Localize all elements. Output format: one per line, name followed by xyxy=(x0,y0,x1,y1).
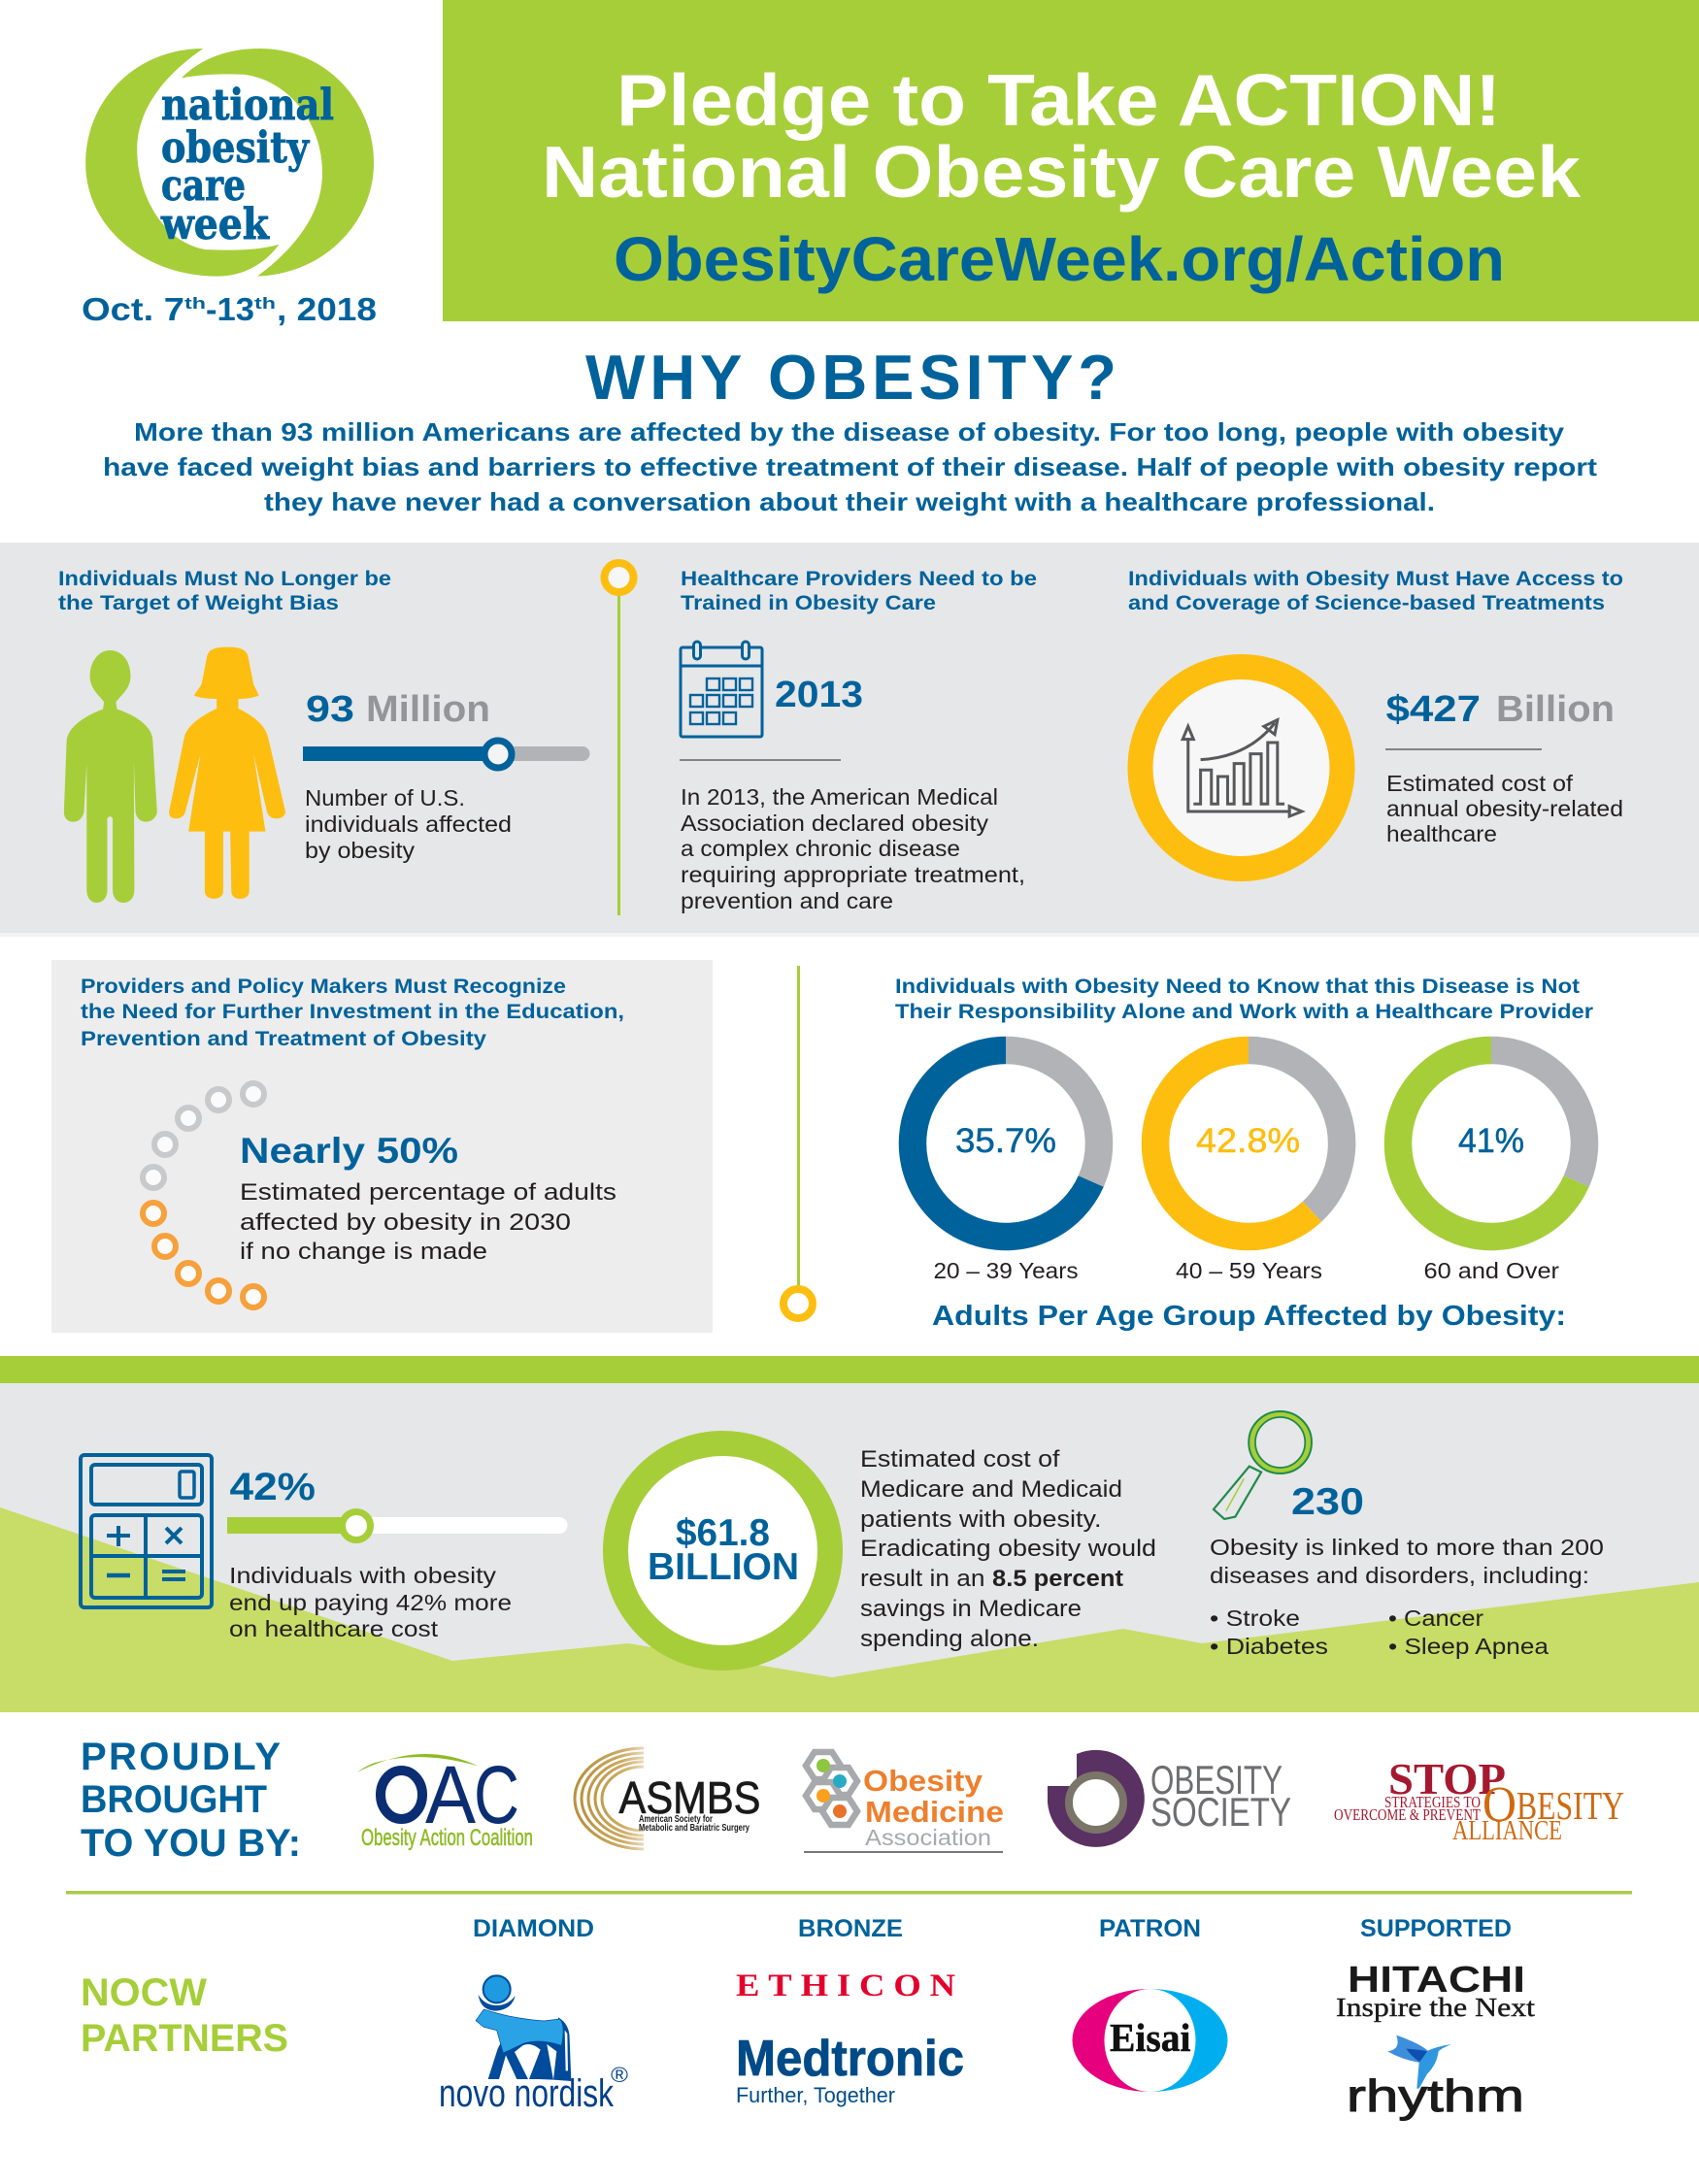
icon: calculator xyxy=(81,1455,212,1607)
description: linked diseases xyxy=(1210,1535,1604,1659)
heading: investment: Prevention and Treatment of Obesity xyxy=(81,1028,486,1050)
heading: weight bias xyxy=(58,568,391,614)
stat: 93 million: Million xyxy=(366,689,490,730)
logo: the obesity society xyxy=(1048,1750,1291,1847)
logo: ASMBS xyxy=(575,1748,761,1849)
chart caption: Adults Per Age Group Affected by Obesity: xyxy=(932,1301,1566,1332)
heading: nocw partners: PARTNERS xyxy=(81,2017,288,2060)
intro text block: have faced weight bias and barriers to effective treatment of their disease. Half of people with obesity report xyxy=(103,452,1597,481)
stat: 42 percent: 42% xyxy=(229,1466,316,1508)
partner tier: supported xyxy=(1336,1915,1536,2121)
logo: obesity medicine association: Obesity xyxy=(863,1764,983,1798)
logo: ASMBS: Metabolic and Bariatric Surgery xyxy=(639,1823,750,1834)
stat: 427 billion xyxy=(1386,689,1615,730)
logo: obesity action coalition: Obesity Action Coalition xyxy=(361,1825,533,1851)
donut chart: 40-59 years xyxy=(1155,1050,1342,1283)
panel: nearly 50 percent xyxy=(51,960,713,1333)
description: annual cost: healthcare xyxy=(1386,821,1497,846)
description: annual cost xyxy=(1386,771,1623,846)
logo: eisai: Eisai xyxy=(1110,2015,1190,2060)
heading: healthcare providers: Trained in Obesity Care xyxy=(681,592,936,614)
heading: responsibility: Their Responsibility Alone and Work with a Healthcare Provider xyxy=(895,1001,1593,1023)
description: 2013 declaration: In 2013, the American Medical xyxy=(681,784,998,810)
description: 2030 estimate: affected by obesity in 2030 xyxy=(240,1209,571,1236)
stat: 427 billion: Billion xyxy=(1496,689,1615,730)
description: linked diseases: Obesity is linked to more than 200 xyxy=(1210,1535,1604,1560)
heading: healthcare providers: Healthcare Providers Need to be xyxy=(681,568,1037,590)
logo: the obesity society: OBESITY xyxy=(1150,1757,1283,1803)
partner tier: patron xyxy=(1072,1915,1227,2092)
description: medicare savings: Estimated cost of xyxy=(860,1446,1060,1473)
icon: rising chart in yellow ring xyxy=(1140,667,1342,869)
logo date: , 2018 xyxy=(277,291,377,327)
description: number of individuals: Number of U.S. xyxy=(305,785,465,811)
slider: 42 percent xyxy=(227,1512,567,1539)
logo: obesity medicine association: Association xyxy=(865,1825,991,1850)
heading: nocw partners: NOCW xyxy=(81,1971,207,2014)
logo: hitachi: Inspire the Next xyxy=(1336,1993,1536,2022)
section: access and coverage xyxy=(1128,568,1623,869)
logo: stop obesity alliance: STOP xyxy=(1388,1754,1506,1803)
section: age group donuts xyxy=(895,976,1593,1332)
description: 2030 estimate: Estimated percentage of adults xyxy=(240,1179,616,1206)
description: number of individuals xyxy=(305,785,512,863)
tier label: bronze: BRONZE xyxy=(798,1915,903,1942)
heading: proudly brought to you by: TO YOU BY: xyxy=(81,1822,301,1865)
logo: national obesity care week xyxy=(82,49,377,327)
logo date: Oct. 7 xyxy=(82,291,184,327)
description: number of individuals: by obesity xyxy=(305,838,416,863)
logo: stop obesity alliance: ALLIANCE xyxy=(1452,1816,1562,1846)
description: 2013 declaration: a complex chronic disease xyxy=(681,836,960,861)
tier label: supported: SUPPORTED xyxy=(1360,1915,1512,1942)
stat: 427 billion: $427 xyxy=(1386,689,1481,730)
logo: stop obesity alliance: OVERCOME & PREVENT xyxy=(1334,1805,1481,1824)
heading: nocw partners xyxy=(81,1971,288,2060)
description: 2013 declaration: requiring appropriate treatment, xyxy=(681,862,1025,887)
donut chart: 60 and over xyxy=(1398,1050,1584,1283)
stat: 2013: 2013 xyxy=(775,675,863,715)
stat: nearly 50 percent: Nearly 50% xyxy=(240,1131,458,1171)
description: medicare savings: Eradicating obesity would xyxy=(860,1536,1156,1562)
banner: pledge to take action: ObesityCareWeek.org/Action xyxy=(614,224,1505,294)
description: linked diseases: • Stroke xyxy=(1210,1605,1300,1631)
heading: responsibility xyxy=(895,976,1593,1023)
partner tier: bronze xyxy=(736,1915,964,2107)
divider with yellow ring xyxy=(783,966,813,1318)
intro text block xyxy=(103,417,1597,516)
banner: pledge to take action: National Obesity Care Week xyxy=(542,131,1581,213)
donut chart: 40-59 years: 40 – 59 Years xyxy=(1176,1258,1322,1283)
description: 42 percent: on healthcare cost xyxy=(229,1616,439,1641)
intro text block: they have never had a conversation about their weight with a healthcare professional. xyxy=(264,487,1435,516)
logo: eisai xyxy=(1072,1989,1227,2092)
stat: 230: 230 xyxy=(1291,1481,1364,1523)
description: medicare savings: Medicare and Medicaid xyxy=(860,1476,1122,1503)
heading: access and coverage xyxy=(1128,568,1623,614)
heading: investment: Providers and Policy Makers Must Recognize xyxy=(81,976,566,998)
logo swirl xyxy=(85,49,374,277)
logo: obesity medicine association: Medicine xyxy=(865,1795,1004,1829)
heading: investment xyxy=(81,976,624,1050)
logo wordmark: obesity xyxy=(161,123,310,173)
heading: proudly brought to you by: BROUGHT xyxy=(81,1778,267,1821)
description: annual cost: annual obesity-related xyxy=(1386,796,1623,821)
description: 2030 estimate xyxy=(240,1179,616,1265)
heading: why obesity: WHY OBESITY? xyxy=(585,342,1116,413)
description: number of individuals: individuals affected xyxy=(305,811,512,837)
logo: ethicon: ETHICON xyxy=(736,1969,964,2003)
logo wordmark: week xyxy=(160,200,270,249)
description: 42 percent xyxy=(229,1563,512,1641)
logo: obesity action coalition xyxy=(357,1749,533,1851)
donut chart: 20-39 years: 35.7% xyxy=(955,1122,1056,1160)
description: 2013 declaration: Association declared obesity xyxy=(681,811,989,836)
logo: hitachi xyxy=(1336,1960,1536,2022)
heading: healthcare providers xyxy=(681,568,1037,614)
icon: calendar xyxy=(681,642,762,737)
logo: novo nordisk: novo nordisk xyxy=(439,2072,615,2115)
heading: investment: the Need for Further Investment in the Education, xyxy=(81,1001,624,1023)
banner: pledge to take action: Pledge to Take ACTION! xyxy=(616,59,1501,141)
tier label: diamond: DIAMOND xyxy=(473,1915,594,1942)
description: 2013 declaration xyxy=(681,784,1025,913)
heading: proudly brought to you by: PROUDLY xyxy=(81,1736,281,1778)
logo: medtronic: Medtronic xyxy=(736,2031,964,2087)
icon: magnifying glass xyxy=(1214,1411,1312,1519)
logo: novo nordisk: ® xyxy=(611,2063,628,2087)
section: weight bias xyxy=(58,568,590,903)
logo: rhythm xyxy=(1347,2035,1524,2121)
description: linked diseases: • Sleep Apnea xyxy=(1388,1634,1549,1659)
logo wordmark: care xyxy=(161,161,246,211)
logo: ASMBS: American Society for xyxy=(639,1814,713,1825)
description: linked diseases: diseases and disorders, including: xyxy=(1210,1563,1589,1588)
panel: top gray band xyxy=(0,543,1699,937)
logo date: th xyxy=(254,294,276,313)
heading: weight bias: Individuals Must No Longer be xyxy=(58,568,391,590)
logo: obesity action coalition: A xyxy=(425,1749,476,1840)
tier label: patron: PATRON xyxy=(1099,1915,1201,1942)
logo wordmark xyxy=(160,81,334,249)
logo: stop obesity alliance: BESITY xyxy=(1516,1783,1624,1828)
logo: stop obesity alliance xyxy=(1334,1754,1624,1846)
description: annual cost: Estimated cost of xyxy=(1386,771,1574,796)
description: 2013 declaration: prevention and care xyxy=(681,888,893,913)
stat: 93 million: 93 xyxy=(306,689,354,730)
logo date: th xyxy=(184,294,206,313)
description: 42 percent: end up paying 42% more xyxy=(229,1590,512,1615)
panel: cost band xyxy=(0,1356,1699,1712)
description: linked diseases: • Diabetes xyxy=(1210,1634,1328,1659)
slider: 93 million xyxy=(303,741,590,768)
logo: hitachi: HITACHI xyxy=(1348,1960,1525,2001)
logo: stop obesity alliance: STRATEGIES TO xyxy=(1384,1793,1481,1811)
logo: medtronic: Further, Together xyxy=(736,2083,895,2107)
icon: dot arc xyxy=(143,1083,264,1307)
intro text block: More than 93 million Americans are affected by the disease of obesity. For too long, people with obesity xyxy=(134,417,1565,447)
description: medicare savings xyxy=(860,1446,1156,1652)
logo: the obesity society: SOCIETY xyxy=(1150,1789,1291,1835)
logo wordmark: national xyxy=(161,81,334,130)
donut chart: 60 and over: 60 and Over xyxy=(1423,1258,1559,1283)
logo date xyxy=(82,291,377,327)
description: medicare savings: savings in Medicare xyxy=(860,1596,1082,1622)
description: linked diseases: • Cancer xyxy=(1388,1605,1483,1631)
heading: access and coverage: and Coverage of Science-based Treatments xyxy=(1128,592,1605,614)
heading: responsibility: Individuals with Obesity Need to Know that this Disease is Not xyxy=(895,976,1580,998)
banner: pledge to take action xyxy=(443,0,1699,321)
logo: stop obesity alliance: O xyxy=(1482,1777,1516,1833)
divider with yellow ring xyxy=(604,563,633,915)
donut chart: 20-39 years xyxy=(913,1050,1099,1283)
heading: proudly brought to you by xyxy=(81,1736,301,1865)
stat ring: 61.8 billion: BILLION xyxy=(648,1546,799,1588)
description: medicare savings: spending alone. xyxy=(860,1626,1039,1652)
heading: weight bias: the Target of Weight Bias xyxy=(58,592,339,614)
heading: access and coverage: Individuals with Obesity Must Have Access to xyxy=(1128,568,1623,590)
icon: man figure xyxy=(64,650,157,903)
description: 2030 estimate: if no change is made xyxy=(240,1239,487,1265)
section: healthcare providers xyxy=(680,568,1037,913)
description: medicare savings: result in an xyxy=(860,1566,984,1592)
stat ring: 61.8 billion xyxy=(616,1443,830,1658)
logo date: -13 xyxy=(206,291,254,327)
logo: obesity action coalition: C xyxy=(474,1749,519,1840)
stat: 93 million xyxy=(306,689,490,730)
description: medicare savings: 8.5 percent xyxy=(992,1566,1123,1592)
donut chart: 20-39 years: 20 – 39 Years xyxy=(934,1258,1078,1283)
partner tier: diamond xyxy=(439,1915,628,2115)
stat ring: 61.8 billion: $61.8 xyxy=(676,1512,770,1554)
logo: rhythm: rhythm xyxy=(1347,2070,1524,2121)
logo: ASMBS: ASMBS xyxy=(619,1772,761,1823)
description: medicare savings: patients with obesity. xyxy=(860,1506,1101,1533)
logo: obesity medicine association xyxy=(804,1752,1004,1853)
description: 42 percent: Individuals with obesity xyxy=(229,1563,497,1588)
donut chart: 60 and over: 41% xyxy=(1458,1122,1524,1160)
donut chart: 40-59 years: 42.8% xyxy=(1196,1122,1300,1160)
icon: woman figure xyxy=(169,647,285,899)
logo: novo nordisk xyxy=(439,1975,628,2115)
